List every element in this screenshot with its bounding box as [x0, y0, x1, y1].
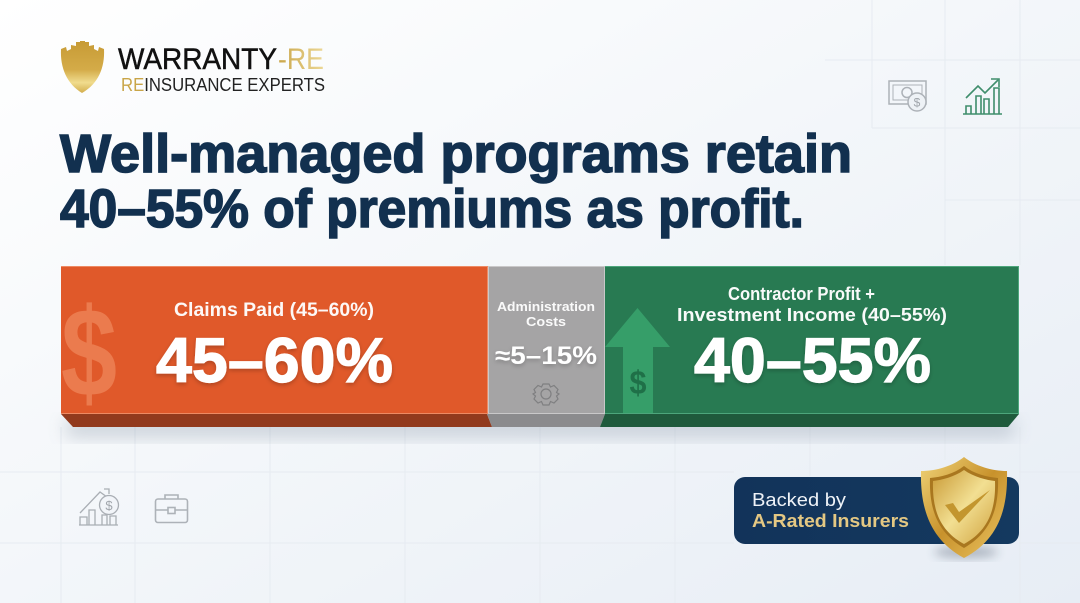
- panel: claims paid: [61, 266, 492, 427]
- icon: growth with coin: [79, 489, 118, 525]
- badge text line 1: Backed by: [752, 490, 846, 510]
- icon: dollar watermark: $: [61, 282, 117, 423]
- icon: up arrow: [605, 308, 670, 413]
- icon: dollar on arrow: $: [630, 364, 646, 401]
- panel: administration costs: [487, 266, 605, 427]
- icon: growth with coin: $: [105, 498, 113, 513]
- claims value: 45–60%: [156, 326, 393, 396]
- icon: gold shield: [921, 457, 1007, 558]
- admin value: ≈5–15%: [495, 342, 597, 370]
- icon: gear: [533, 384, 559, 405]
- badge text line 2: A-Rated Insurers: [752, 511, 909, 531]
- logo tagline: REINSURANCE EXPERTS: [121, 75, 325, 95]
- logo: [61, 41, 325, 95]
- profit label: Contractor Profit +: [728, 284, 875, 304]
- title: Well-managed programs retain: [60, 124, 852, 184]
- panel: contractor profit: [600, 266, 1019, 427]
- title: 40–55% of premiums as profit.: [60, 179, 804, 239]
- icon: logo shield: [61, 41, 104, 93]
- icon: growth chart: [963, 79, 1002, 114]
- logo suffix: -RE: [278, 43, 324, 76]
- stacked bar chart: [61, 266, 1019, 436]
- icon: money: [889, 81, 926, 111]
- claims label: Claims Paid (45–60%): [174, 300, 374, 321]
- title: [60, 124, 852, 239]
- icon: briefcase: [156, 495, 188, 522]
- badge: backed by A-rated insurers: [734, 457, 1019, 558]
- profit label line 2: Investment Income (40–55%): [677, 305, 947, 325]
- admin label line 2: Costs: [526, 314, 566, 329]
- admin label: Administration: [497, 299, 595, 314]
- profit value: 40–55%: [694, 326, 931, 396]
- icon: money: $: [914, 96, 921, 110]
- logo wordmark: WARRANTY: [118, 43, 277, 76]
